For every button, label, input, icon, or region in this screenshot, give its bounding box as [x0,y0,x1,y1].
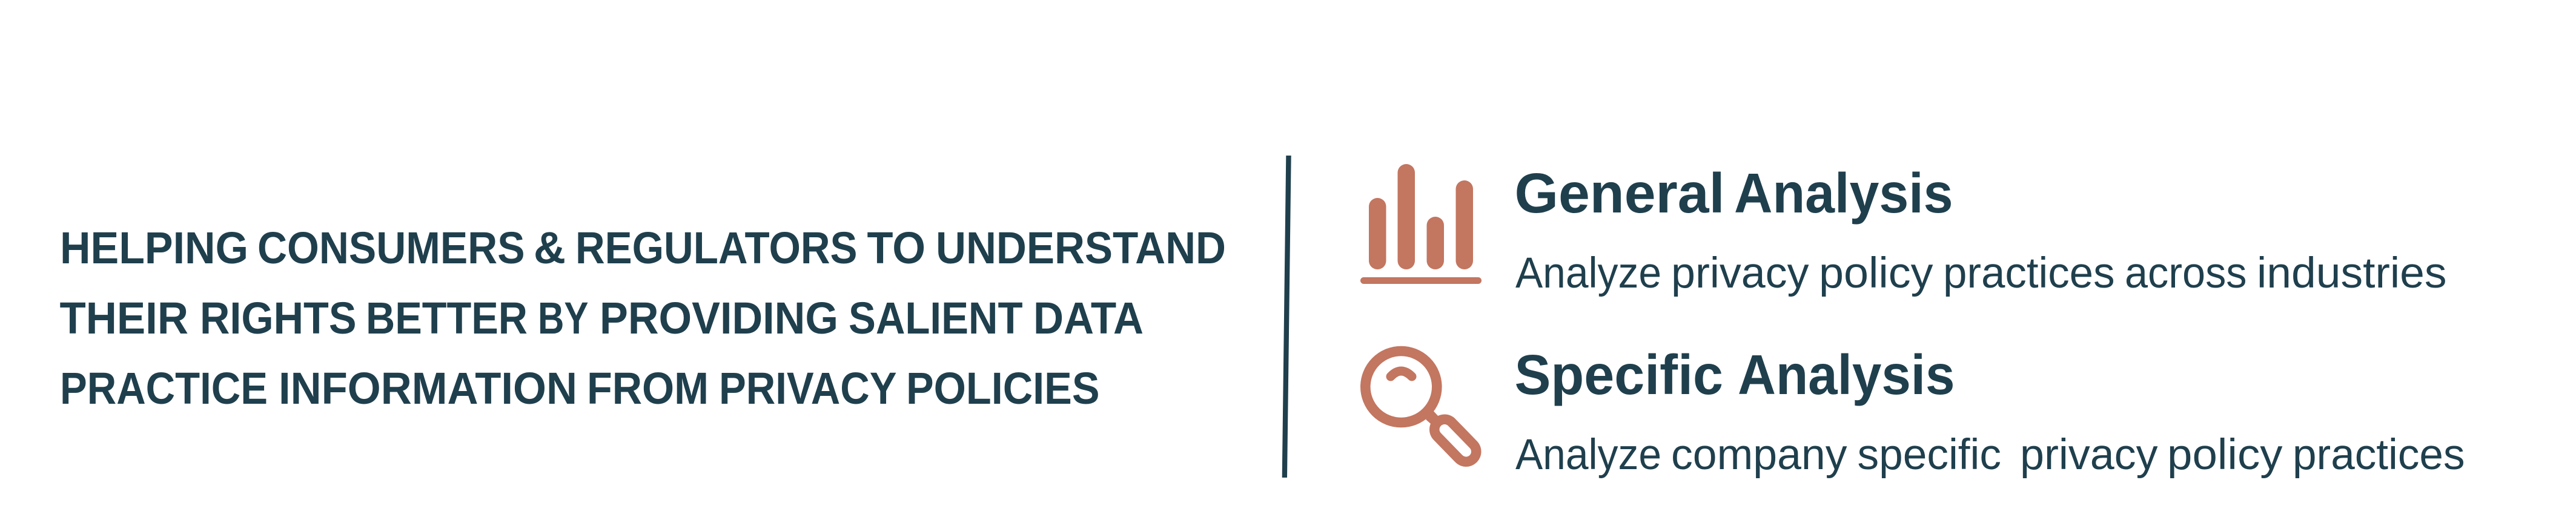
main statement text: HELPING [60,223,248,273]
main statement text: & [534,223,566,273]
description: specific analysis: practices [2293,431,2465,479]
main statement text: INFORMATION [279,363,577,413]
heading: specific analysis: Analysis [1738,343,1955,406]
description: general analysis [1515,249,2447,297]
main statement text: PROVIDING [600,293,838,343]
main statement text: SALIENT [849,293,1022,343]
main statement text: BY [538,293,589,343]
vertical divider line [1282,156,1291,478]
main statement text: PRIVACY [719,363,896,413]
description: specific analysis [1515,431,2465,479]
icon: magnifying glass [1365,351,1466,452]
icon: bar chart [1360,164,1482,284]
description: general analysis: privacy [1671,249,1809,297]
main statement text [59,223,1226,413]
heading: specific analysis: Specific [1514,343,1723,406]
description: general analysis: policy [1819,249,1933,297]
heading: general analysis: Analysis [1734,162,1953,225]
main statement text: UNDERSTAND [936,223,1226,273]
main statement text: DATA [1033,293,1144,343]
description: general analysis: industries [2257,249,2447,297]
description: specific analysis: specific [1857,431,2001,479]
heading: specific analysis [1514,343,1955,406]
main statement text: RIGHTS [200,293,356,343]
description: general analysis: across [2125,249,2247,297]
main statement text: POLICIES [906,363,1100,413]
description: general analysis: practices [1943,249,2115,297]
main statement text: BETTER [366,293,528,343]
panel: specific analysis [1365,343,2465,479]
description: specific analysis: Analyze [1515,431,1661,479]
heading: general analysis [1514,162,1953,225]
panel: analysis types [1360,162,2465,479]
main statement text: THEIR [59,293,188,343]
main statement text: PRACTICE [60,363,268,413]
description: specific analysis: privacy [2020,431,2158,479]
heading: general analysis: General [1514,162,1725,225]
description: specific analysis: policy [2167,431,2283,479]
main statement text: TO [867,223,925,273]
panel: general analysis [1360,162,2447,297]
description: general analysis: Analyze [1515,249,1661,297]
main statement text: REGULATORS [575,223,858,273]
description: specific analysis: company [1671,431,1847,479]
main statement text: CONSUMERS [257,223,525,273]
main statement text: FROM [587,363,709,413]
